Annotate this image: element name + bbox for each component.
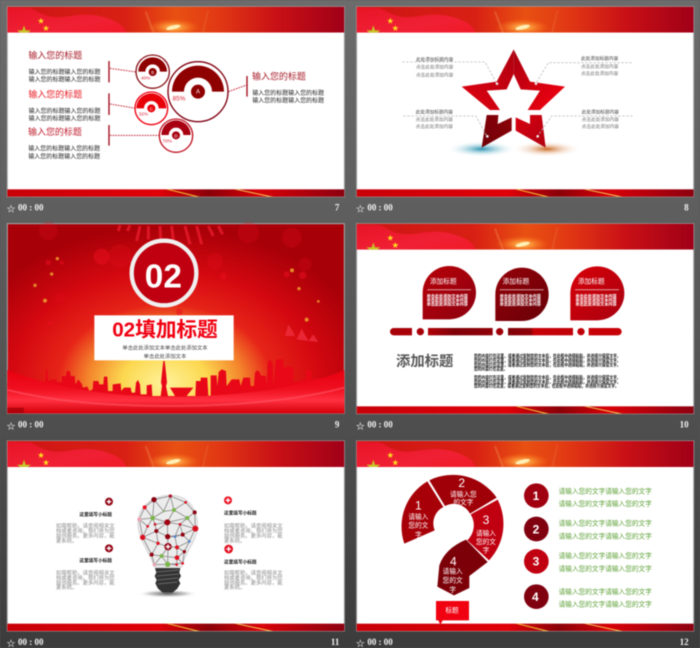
slide 11: light bulb network [7, 441, 344, 647]
slide 7 left text block 1: 输入您的标题 [28, 49, 82, 60]
gauge B 40%: B [151, 70, 154, 75]
timeline bar [390, 328, 622, 335]
slide 7 left text block 3 [28, 126, 100, 160]
list item 4: 请输入您的文字请输入您的文字 [559, 587, 652, 596]
title box: 单击此处添加文本 [144, 352, 187, 360]
text block top left: 如需帮助，请查阅相关文 [56, 522, 115, 530]
drop 1: 单击此处添加文本内容 [427, 300, 468, 306]
star callout dots [486, 82, 539, 138]
slide 10 frame, header and footer [357, 224, 694, 414]
drop 3: 单击此处添加文本内容 [575, 292, 617, 298]
slide 7 left text block 3: 输入您的标题 [28, 126, 82, 137]
title box: 02填加标题 [112, 317, 218, 341]
text block bottom right: 更系统。 [224, 583, 245, 591]
text block top left: 档或者咨询，我们将为您 [56, 527, 115, 535]
drop 1: 添加标题 [430, 277, 457, 286]
slide 8 time label: 00 : 00 [367, 202, 393, 212]
star text top left: 此处添加标题内容 [416, 56, 454, 63]
star callout lines [402, 62, 633, 136]
slide 7 left text block 2 [28, 88, 100, 123]
question mark segment 2: 2 [458, 476, 465, 490]
white ring with 02: 02 [145, 258, 182, 295]
star text top left [416, 56, 454, 78]
figure silhouettes [285, 324, 318, 342]
slide 7 number: 7 [335, 202, 340, 212]
list item 3: 3 [533, 555, 540, 569]
slide 9: section cover [7, 222, 344, 430]
title box: 单击此处添加文本单击此处添加文本 [122, 343, 208, 351]
text block top left: 更系统。 [56, 536, 77, 544]
text block top left [56, 511, 115, 544]
star text top right: 此处添加标题内容 [581, 55, 619, 62]
slide 7 left text block 3: 输入您的标题输入您的标题 [28, 145, 100, 153]
slide 7 right text block: 输入您的标题输入您的标题 [252, 97, 324, 105]
gauge D 70% [159, 119, 193, 152]
gauge B 40% [136, 55, 169, 88]
slide 10 time label [357, 420, 393, 430]
slide 7 right text block [252, 70, 324, 105]
text block bottom right [224, 558, 283, 591]
paragraph text: 您的内容打在这里，或者通过复制您的文本后，在此框中选择粘贴，并选择只保留文字。 [474, 378, 621, 385]
light bulb [137, 494, 198, 598]
slide 9 time label: 00 : 00 [18, 420, 44, 430]
star text top left: 点击此处添加内容 [416, 64, 454, 71]
slide 12 time label [357, 637, 393, 647]
text block bottom right: 这里填写小标题 [224, 558, 257, 565]
star text bottom left: 点击此处添加内容 [416, 116, 453, 123]
list item 1: 请输入您的文字请输入您的文字 [559, 486, 652, 495]
list item 4: 请输入您的文字请输入您的文字 [559, 600, 652, 609]
text block top right: 更系统。 [224, 536, 245, 544]
list item 1 [524, 483, 652, 508]
title tag [436, 601, 469, 625]
paragraph text: 您的内容打在这里。 [474, 365, 507, 372]
plus icon bottom right [224, 545, 233, 553]
slide 7 left text block 3: 输入您的标题输入您的标题 [28, 152, 100, 160]
slide 7 left text block 1: 输入您的标题输入您的标题 [29, 75, 100, 83]
question mark segment 1: 您的文 [408, 520, 429, 529]
text block bottom left: 如需帮助，请查阅相关文 [56, 568, 115, 576]
question mark segment 3: 3 [483, 513, 490, 527]
paragraph text [474, 353, 621, 390]
list item 2 [524, 517, 652, 541]
add title heading: 添加标题 [396, 353, 453, 370]
white ring with 02 [132, 241, 196, 305]
text block top right: 提供服务。更多内容，能 [224, 532, 283, 540]
text block top left: 提供服务。更多内容，能 [56, 532, 115, 540]
star text bottom left [416, 108, 453, 130]
text block top right: 如需帮助，请查阅相关文 [224, 522, 283, 530]
drop 2 [495, 268, 549, 321]
slide 9 number: 9 [335, 420, 340, 430]
slide 10 time label: 00 : 00 [367, 420, 393, 430]
plus icon top right [224, 496, 232, 504]
question mark segment 4: 您的文 [443, 575, 463, 584]
slide 7 frame, header and footer [7, 7, 344, 197]
question mark segment 4: 请输入 [443, 567, 463, 576]
question mark segment 2 [429, 475, 497, 514]
question mark segment 3 [467, 500, 503, 560]
gauge B 40%: 40% [141, 76, 150, 81]
question mark segment 4: 字 [449, 585, 456, 594]
gauge D 70%: 70% [163, 139, 172, 144]
drop 3: 单击此处添加文本内容 [575, 296, 617, 302]
text block bottom left: 这里填写小标题 [79, 557, 112, 564]
slide 10 number: 10 [680, 420, 689, 430]
gauge A 85%: 85% [173, 96, 186, 103]
drop 2: 单击此处添加文本内容 [500, 300, 541, 306]
drop 1 [423, 266, 476, 319]
slide 8 frame, header and footer [357, 7, 694, 197]
slide 7 left text block 2: 输入您的标题 [28, 88, 82, 99]
list item 3: 请输入您的文字请输入您的文字 [559, 551, 652, 560]
gauge C 32% [135, 92, 168, 125]
star text bottom right: 点击此处添加内容 [582, 116, 619, 123]
slide 12: question mark [357, 441, 694, 647]
drop 2: 添加标题 [503, 277, 530, 286]
question mark segment 3: 字 [483, 546, 490, 555]
question mark segment 3: 请输入 [476, 528, 496, 537]
list item 4: 4 [532, 590, 539, 604]
slide 7 time label [8, 202, 44, 212]
star text bottom right [582, 108, 619, 130]
star text top left: 点击此处添加内容 [416, 71, 454, 78]
list item 4 [524, 584, 652, 609]
text block bottom left: 档或者咨询，我们将为您 [56, 573, 115, 581]
question mark segment 1: 1 [415, 499, 422, 513]
text block top left: 这里填写小标题 [79, 511, 112, 518]
slide 8: star diagram [357, 7, 694, 212]
drop 1: 单击此处添加文本内容 [427, 296, 468, 302]
question mark segment 2: 的文字 [453, 498, 474, 507]
list item 3: 请输入您的文字请输入您的文字 [559, 564, 652, 573]
drop 2: 单击此处添加文本内容 [500, 292, 541, 298]
gauge A 85% [168, 62, 228, 122]
list item 1: 请输入您的文字请输入您的文字 [559, 499, 652, 508]
question mark segment 1: 字 [415, 530, 422, 539]
star text bottom left: 此处添加标题内容 [416, 108, 453, 115]
slide 7 right text block: 输入您的标题 [252, 70, 306, 81]
star text top right [581, 55, 619, 77]
paragraph text: 您的内容打在这里，或者通过复制您的文本后，在此框中选择粘贴，并选择只保留文字。 [474, 374, 621, 381]
slide 9 time label [8, 420, 44, 430]
city skyline [7, 359, 344, 413]
list item 3 [524, 549, 652, 574]
star text bottom right: 点击此处添加内容 [582, 123, 619, 130]
slide 12 time label: 00 : 00 [367, 637, 393, 647]
question mark segment 4 [437, 540, 488, 595]
star text bottom right: 此处添加标题内容 [582, 108, 619, 115]
gauge A 85%: A [196, 90, 200, 96]
paragraph text: 您的内容打在这里，或者通过复制您的文本后，在此框中选择粘贴，并选择只保留文字。 [474, 383, 619, 390]
text block bottom left [56, 557, 115, 591]
title tag: 标题 [445, 606, 459, 615]
question mark segment 1: 请输入 [408, 512, 429, 521]
drop 3: 单击此处添加文本内容 [575, 300, 617, 306]
drop 2: 单击此处添加文本内容 [500, 296, 541, 302]
slide 8 time label [357, 202, 393, 212]
slide 8 number: 8 [684, 202, 689, 212]
gauge C 32%: C [150, 106, 154, 111]
slide 7 time label: 00 : 00 [18, 202, 44, 212]
slide 7 left text block 2: 输入您的标题输入您的标题 [29, 107, 100, 115]
question mark segment 3: 您的文 [476, 537, 496, 546]
slide 11 frame, header and footer [7, 441, 344, 631]
plus icon top left [105, 498, 113, 506]
slide 12 frame, header and footer [357, 441, 694, 631]
gauge D 70%: D [174, 133, 178, 138]
slide 10: timeline with drops [357, 224, 694, 430]
text block top right [224, 509, 283, 544]
paragraph text: 您的内容打在这里，或者通过复制您的文本后，在此框中选择粘贴，并选择只保留文字。 [474, 357, 621, 364]
paragraph text: 您的内容打在这里，或者通过复制您的文本后，在此框中选择粘贴，并选择只保留文字。 [474, 353, 621, 360]
slide 7 left text block 1 [28, 49, 100, 83]
text block bottom left: 更系统。 [56, 583, 77, 591]
slide 11 time label [8, 637, 44, 647]
title box [94, 315, 234, 360]
star text top right: 点击此处添加内容 [581, 63, 619, 70]
fireworks and bokeh [33, 222, 320, 326]
text block bottom right: 档或者咨询，我们将为您 [224, 573, 283, 581]
plus icon bottom left [105, 544, 113, 552]
question mark segment 1 [402, 481, 443, 544]
slide 7 right text block: 输入您的标题输入您的标题 [252, 89, 324, 97]
text block top right: 这里填写小标题 [224, 509, 257, 516]
list item 2: 请输入您的文字请输入您的文字 [559, 519, 652, 528]
slide 7: gauge circles [7, 7, 344, 212]
question mark segment 2: 请输入您 [450, 490, 477, 499]
paragraph text: 您的内容打在这里，或者通过复制您的文本后，在此框中选择粘贴，并选择只保留文字。 [474, 361, 621, 368]
text block bottom left: 提供服务。更多内容，能 [56, 578, 115, 586]
star floor shadows [447, 141, 582, 157]
slide 7 connector lines [109, 61, 247, 146]
list item 2: 2 [533, 522, 540, 536]
red ribbon [7, 370, 344, 413]
text block bottom right: 提供服务。更多内容，能 [224, 578, 283, 586]
slide 11 time label: 00 : 00 [18, 637, 44, 647]
slide 12 number: 12 [680, 637, 689, 647]
list item 1: 1 [533, 489, 540, 503]
slide 7 left text block 1: 输入您的标题输入您的标题 [29, 68, 100, 76]
question mark segment 4: 4 [450, 555, 457, 569]
text block bottom right: 如需帮助，请查阅相关文 [224, 568, 283, 576]
text block top right: 档或者咨询，我们将为您 [224, 527, 283, 535]
slide 7 left text block 2: 输入您的标题输入您的标题 [29, 115, 100, 123]
slide 11 number: 11 [331, 637, 340, 647]
star text bottom left: 点击此处添加内容 [416, 123, 453, 130]
drop 3: 添加标题 [578, 277, 605, 286]
cover background [7, 224, 344, 413]
list item 2: 请输入您的文字请输入您的文字 [559, 532, 652, 541]
drop 3 [570, 266, 624, 320]
red star [462, 49, 565, 148]
star text top right: 点击此处添加内容 [581, 70, 619, 77]
drop 1: 单击此处添加文本内容 [427, 292, 468, 298]
gauge C 32%: 32% [139, 112, 148, 117]
